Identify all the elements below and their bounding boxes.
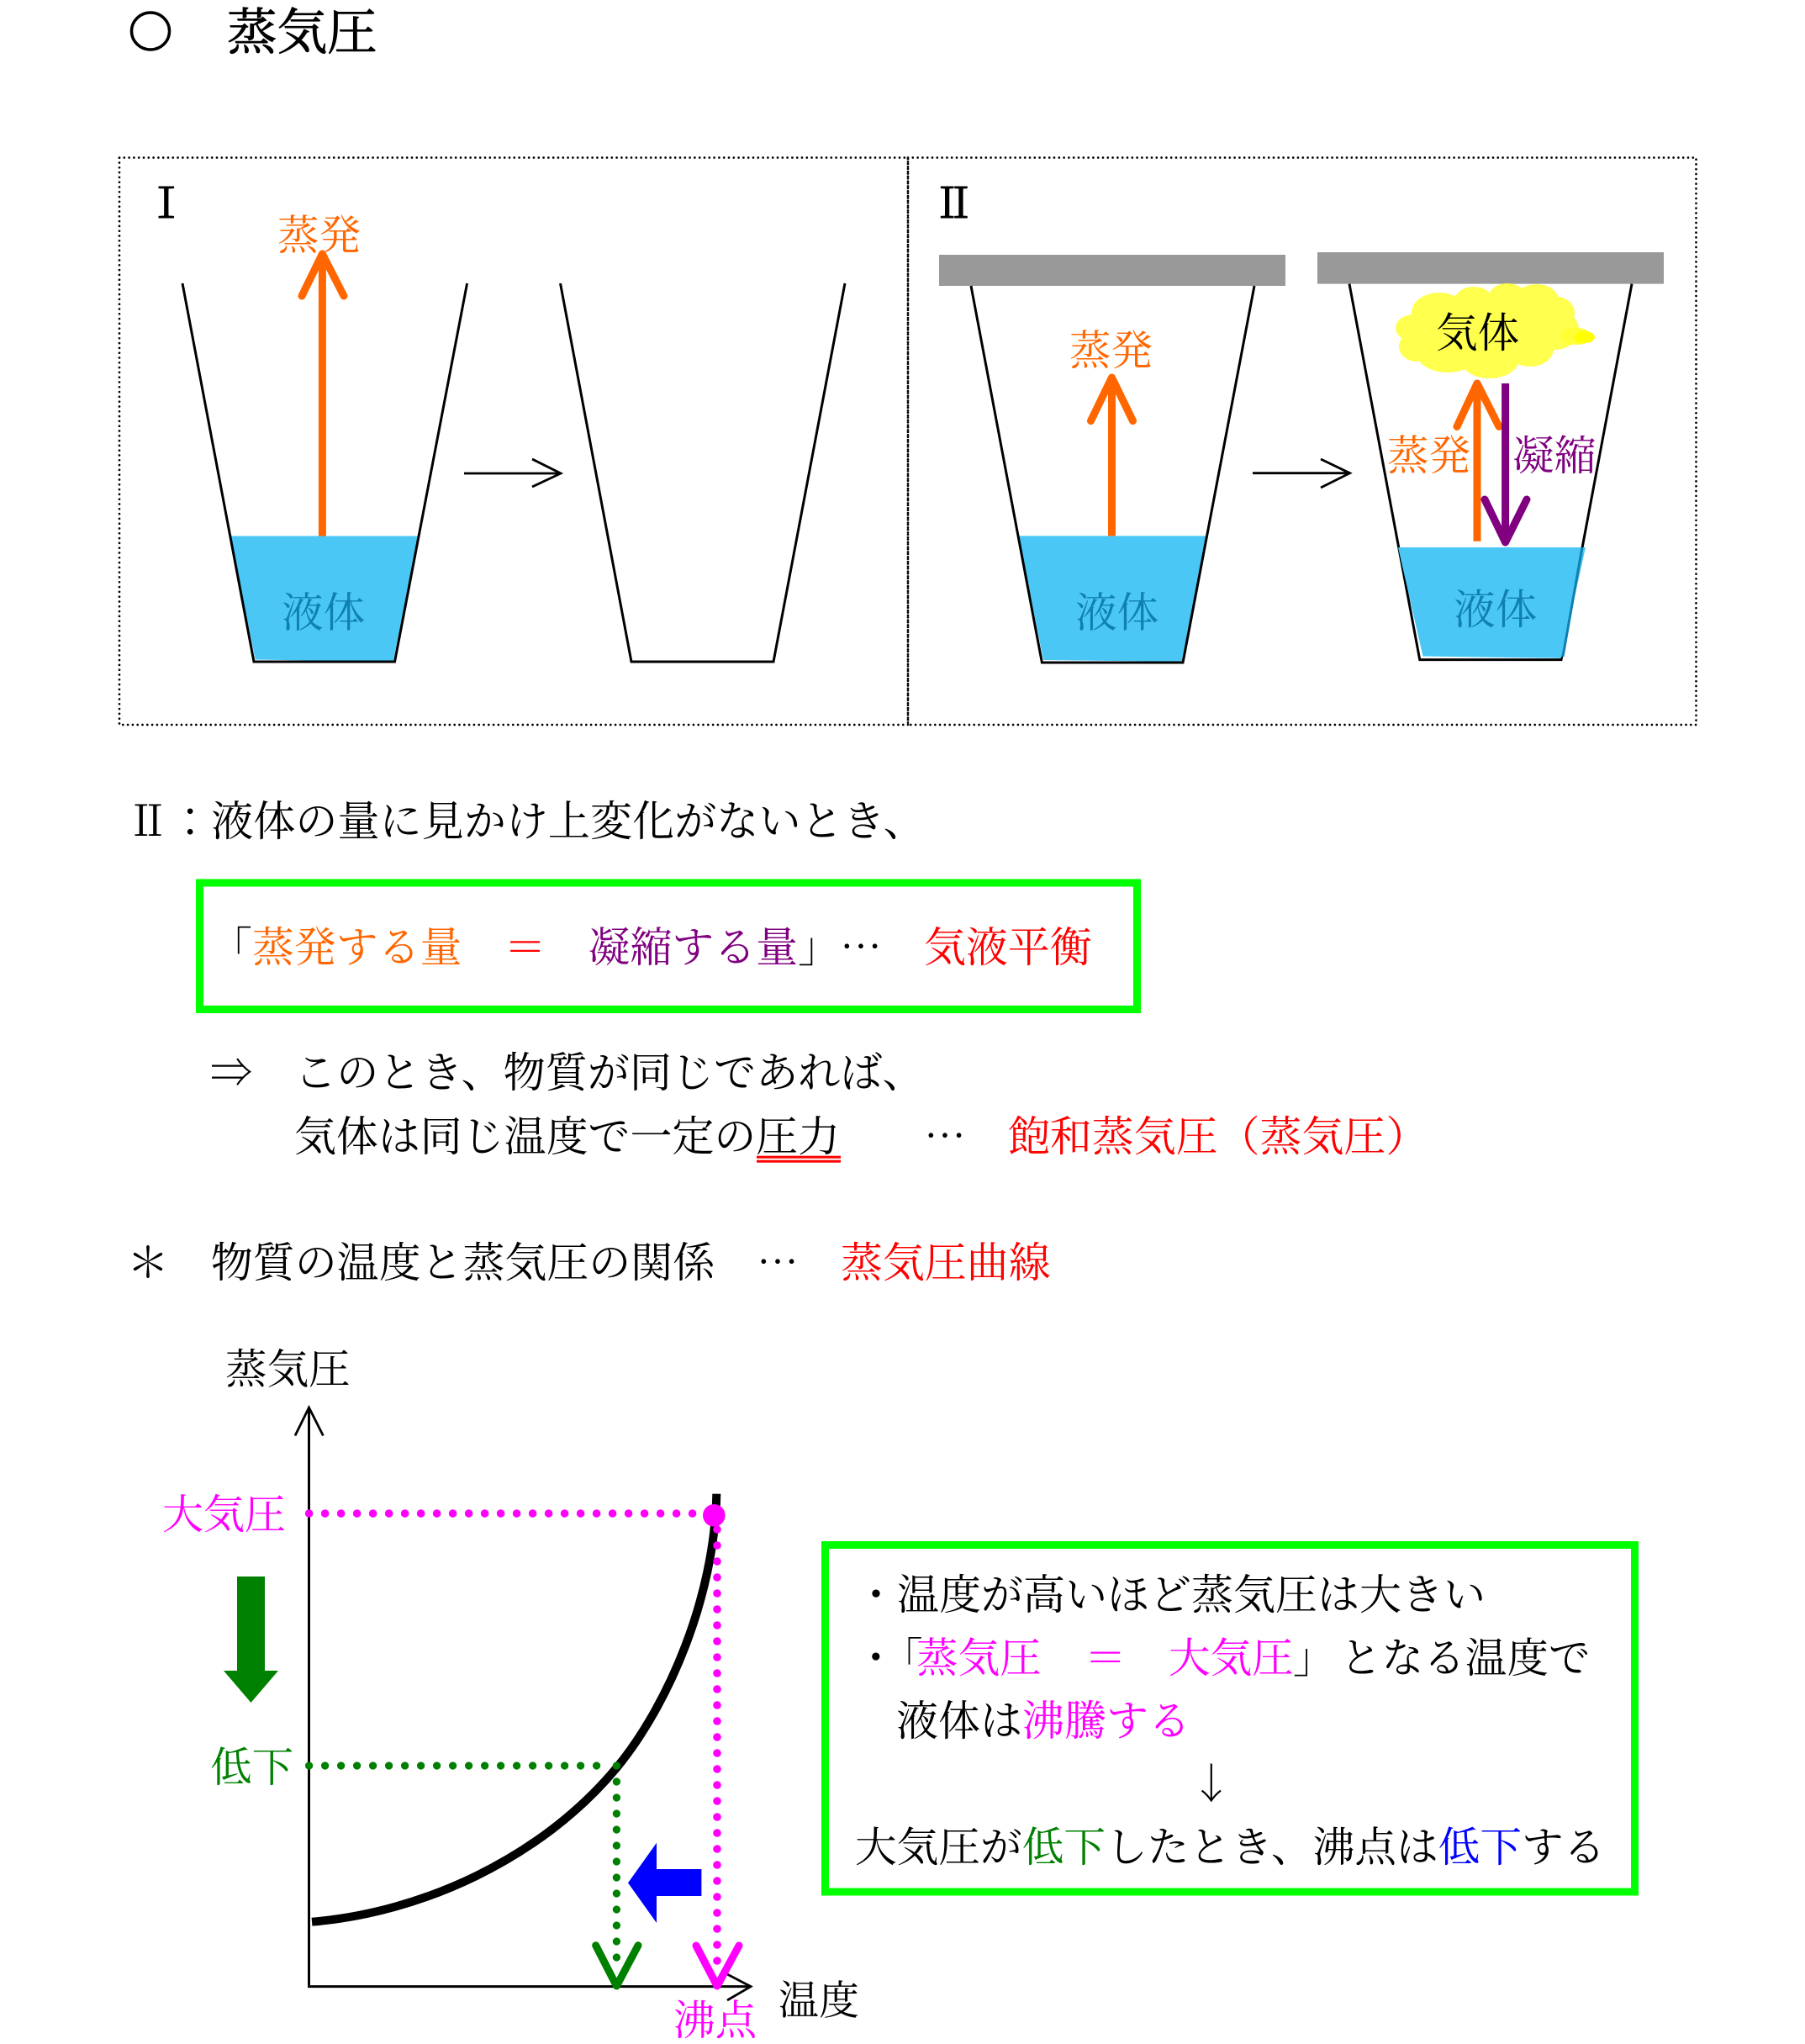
liquid right bbox=[1398, 547, 1586, 658]
label: liquid: 液体 bbox=[282, 580, 365, 639]
lid left bbox=[939, 255, 1285, 286]
liquid left bbox=[1019, 536, 1207, 662]
text: saturated vapor pressure: 気体は同じ温度で一定の圧力 … 飽和蒸気圧（蒸気圧） bbox=[294, 1104, 1428, 1164]
arrow head: green bbox=[596, 1946, 638, 1986]
closed container right bbox=[1349, 284, 1632, 660]
curve bbox=[312, 1494, 716, 1922]
arrow: evaporation bbox=[302, 254, 344, 536]
line: boiling condition: ＝ bbox=[1085, 1625, 1127, 1685]
label: evaporation: 蒸発 bbox=[277, 203, 361, 262]
line: boiling condition: となる温度で bbox=[1340, 1625, 1591, 1685]
double underline bbox=[757, 1156, 841, 1163]
label: liquid right: 液体 bbox=[1454, 577, 1537, 636]
axis label: vapor pressure: 蒸気圧 bbox=[225, 1337, 351, 1396]
point: boiling at atmospheric pressure bbox=[703, 1504, 726, 1527]
cloud: gas bbox=[1396, 283, 1595, 378]
text: condition II: Ⅱ：液体の量に見かけ上変化がないとき、 bbox=[127, 788, 926, 848]
dotted guide: lowered pressure bbox=[309, 1761, 620, 1770]
label: II: Ⅱ bbox=[933, 171, 975, 230]
panel: II closed container bbox=[908, 158, 1697, 725]
box: boiling summary bbox=[826, 1545, 1634, 1892]
dotted guide: lowered boiling point bbox=[613, 1782, 620, 1963]
line: boiling condition: 大気圧 bbox=[1169, 1625, 1294, 1685]
label: evaporation left: 蒸発 bbox=[1069, 318, 1153, 378]
empty container bbox=[560, 283, 845, 662]
label: condensation: 凝縮 bbox=[1512, 423, 1596, 483]
text: same substance statement: ⇒ このとき、物質が同じであれば、 bbox=[210, 1039, 925, 1100]
closed container left bbox=[971, 286, 1254, 663]
box: vapor-liquid equilibrium bbox=[200, 883, 1137, 1009]
label: gas: 気体 bbox=[1436, 300, 1519, 360]
arrow: therefore: ↓ bbox=[1190, 1751, 1232, 1811]
dotted guide: atmospheric pressure bbox=[309, 1509, 698, 1518]
dotted guide: boiling point bbox=[713, 1529, 721, 1967]
arrow: process bbox=[1253, 459, 1350, 488]
line: boiling condition: 」 bbox=[1293, 1625, 1335, 1685]
arrow: process bbox=[464, 459, 561, 487]
x axis bbox=[308, 1974, 751, 2000]
arrow: evaporation left bbox=[1091, 378, 1133, 536]
arrow: boiling point shift bbox=[628, 1843, 701, 1923]
panel: I open container bbox=[119, 158, 908, 725]
line: liquid boils: 液体は沸騰する bbox=[896, 1687, 1190, 1748]
label: I: Ⅰ bbox=[145, 171, 187, 230]
arrow: evaporation right bbox=[1457, 383, 1499, 541]
label: evaporation right: 蒸発 bbox=[1387, 423, 1470, 483]
y axis bbox=[295, 1408, 323, 1985]
line: boiling condition: ・ bbox=[855, 1625, 897, 1685]
line: boiling condition: 蒸気圧 bbox=[916, 1625, 1042, 1685]
line: boiling condition: 「 bbox=[881, 1625, 923, 1685]
label: drop: 低下 bbox=[210, 1735, 293, 1794]
arrow head: magenta bbox=[696, 1946, 739, 1986]
title bbox=[131, 0, 377, 65]
line: higher temperature: ・温度が高いほど蒸気圧は大きい bbox=[855, 1561, 1486, 1622]
line: conclusion: 大気圧が低下したとき、沸点は低下する bbox=[855, 1814, 1605, 1874]
box: vapor-liquid equilibrium: 「蒸発する量 ＝ 凝縮する量」… 気液平衡 bbox=[210, 915, 1092, 974]
label: atmospheric pressure: 大気圧 bbox=[162, 1482, 286, 1541]
chart: vapor pressure curve bbox=[162, 1337, 859, 2044]
open container with liquid bbox=[182, 283, 467, 662]
text: vapor pressure curve heading: ＊ 物質の温度と蒸気圧の関係 … 蒸気圧曲線 bbox=[127, 1230, 1051, 1290]
liquid in open container bbox=[230, 536, 419, 662]
lid right bbox=[1317, 252, 1664, 284]
axis label: temperature: 温度 bbox=[778, 1967, 859, 2026]
arrow: condensation bbox=[1485, 383, 1527, 542]
arrow: pressure drop bbox=[224, 1577, 278, 1703]
label: liquid left: 液体 bbox=[1075, 580, 1158, 639]
